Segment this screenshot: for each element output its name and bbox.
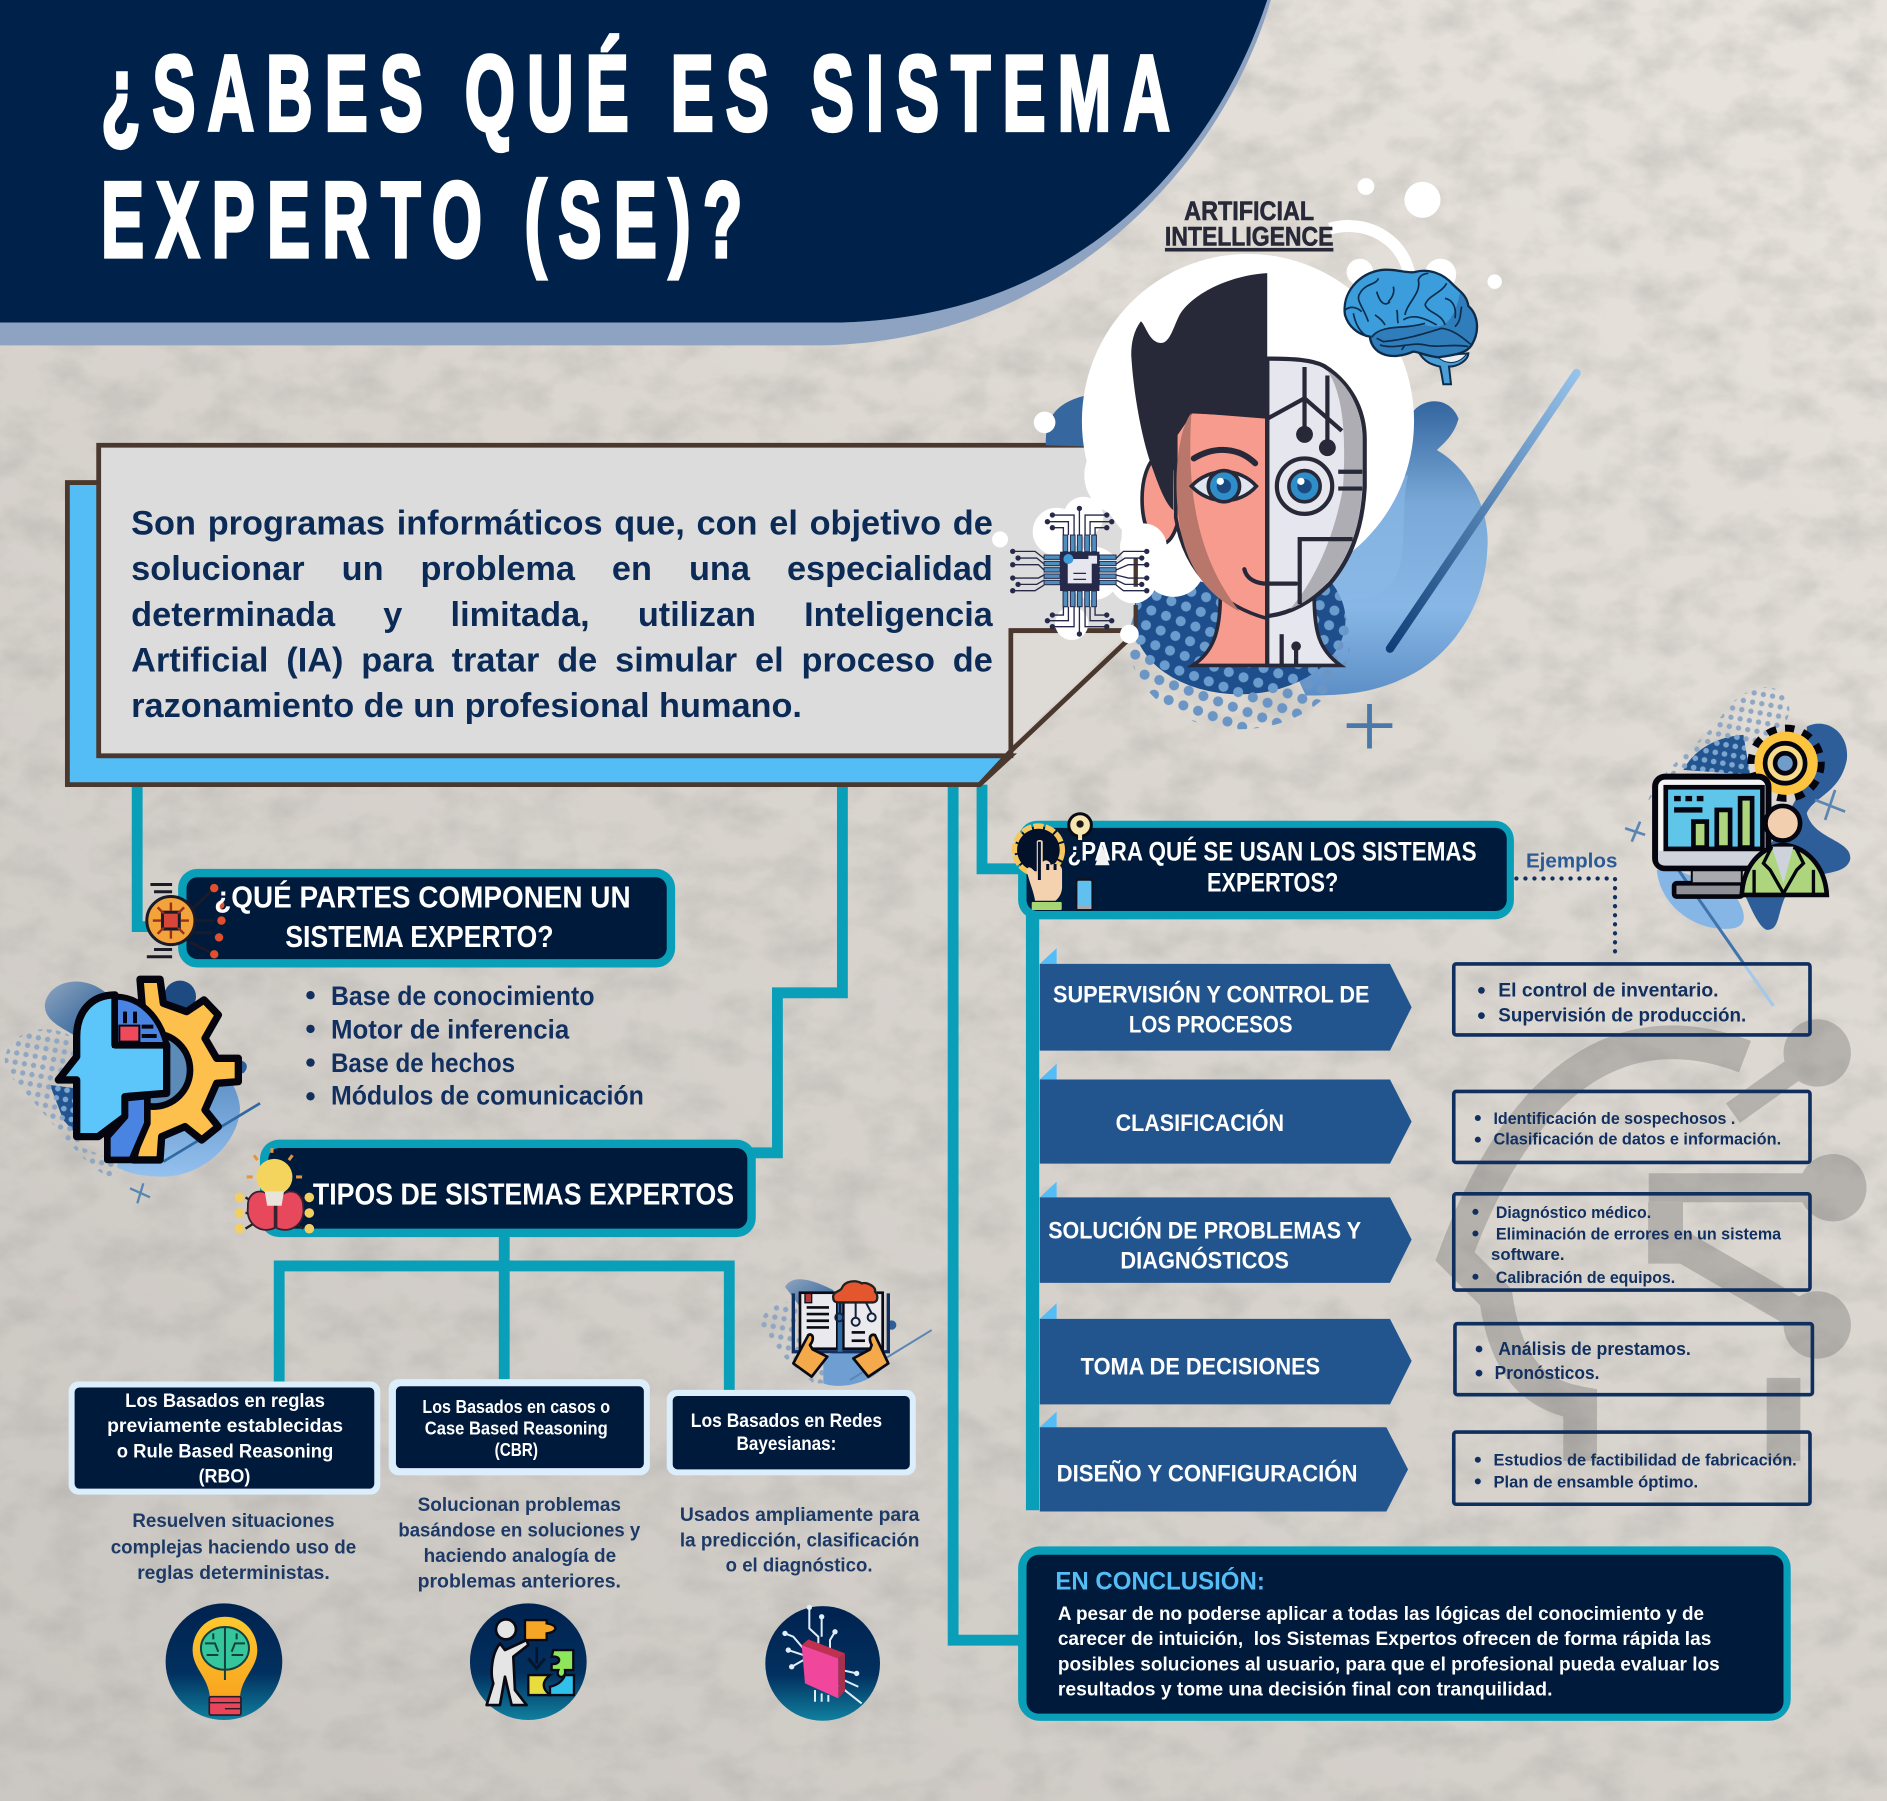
conclusion panel: resultados y tome una decisión final con tranquilidad. bbox=[1058, 1680, 1552, 1701]
AI label: ARTIFICIAL bbox=[1184, 196, 1314, 226]
icon disc: pink chip bbox=[765, 1605, 880, 1721]
pentagon: clasificacion: CLASIFICACIÓN bbox=[1116, 1109, 1284, 1137]
text: redes description bbox=[680, 1504, 920, 1577]
connector lines bbox=[137, 785, 1033, 1640]
definition text: Artificial (IA) para tratar de simular el proceso de bbox=[131, 642, 993, 680]
examples: clasificacion bbox=[1454, 1091, 1810, 1162]
type card: reglas: (RBO) bbox=[199, 1466, 250, 1488]
type card: casos: (CBR) bbox=[495, 1440, 538, 1460]
type card: reglas bbox=[69, 1381, 380, 1495]
type card: reglas: Los Basados en reglas bbox=[125, 1390, 325, 1412]
icon: brain bbox=[1345, 270, 1477, 384]
type card: redes bbox=[667, 1390, 916, 1475]
examples: solucion: Eliminación de errores en un sistema bbox=[1496, 1224, 1782, 1243]
text: reglas description: reglas deterministas. bbox=[137, 1562, 330, 1584]
heading: partes bbox=[147, 869, 675, 968]
dotted connector bbox=[1516, 878, 1615, 960]
text: reglas description: Resuelven situaciones bbox=[132, 1510, 335, 1532]
definition text: determinada y limitada, utilizan Inteligencia bbox=[131, 596, 993, 634]
examples: clasificacion: Identificación de sospechosos . bbox=[1493, 1109, 1735, 1128]
heading: usos bbox=[1014, 814, 1514, 919]
pentagon: solucion: SOLUCIÓN DE PROBLEMAS Y bbox=[1048, 1216, 1361, 1244]
pentagon: supervision: SUPERVISIÓN Y CONTROL DE bbox=[1053, 980, 1370, 1008]
type card: reglas: previamente establecidas bbox=[107, 1415, 343, 1437]
neck bbox=[1193, 596, 1341, 665]
pentagon: solucion bbox=[1040, 1182, 1412, 1283]
heading: usos: EXPERTOS? bbox=[1207, 868, 1338, 898]
title: ¿SABES QUÉ ES SISTEMA bbox=[101, 33, 1170, 153]
definition text: razonamiento de un profesional humano. bbox=[131, 688, 802, 726]
examples: decisiones bbox=[1455, 1324, 1812, 1395]
pentagon: clasificacion bbox=[1040, 1064, 1412, 1164]
heading: tipos: TIPOS DE SISTEMAS EXPERTOS bbox=[313, 1179, 734, 1212]
pentagon: decisiones bbox=[1040, 1303, 1412, 1404]
pentagon: diseno bbox=[1040, 1412, 1408, 1511]
examples: diseno: Estudios de factibilidad de fabricación. bbox=[1493, 1451, 1797, 1470]
list: partes: Base de hechos bbox=[331, 1048, 515, 1078]
icon: circuit chip bbox=[992, 497, 1167, 643]
examples: supervision: El control de inventario. bbox=[1498, 980, 1719, 1001]
pentagon: solucion: DIAGNÓSTICOS bbox=[1120, 1246, 1289, 1274]
plus mark bbox=[1347, 704, 1392, 749]
eyes and mouth bbox=[1191, 450, 1332, 584]
conclusion panel: A pesar de no poderse aplicar a todas las lógicas del conocimiento y de bbox=[1058, 1604, 1704, 1625]
AI label: INTELLIGENCE bbox=[1165, 221, 1333, 251]
pentagon: supervision: LOS PROCESOS bbox=[1129, 1012, 1292, 1039]
pentagon: diseno: DISEÑO Y CONFIGURACIÓN bbox=[1057, 1459, 1357, 1487]
icon disc: bulb with brain bbox=[166, 1603, 282, 1720]
list: partes bbox=[306, 981, 644, 1111]
examples: solucion: Calibración de equipos. bbox=[1496, 1268, 1675, 1287]
examples: supervision bbox=[1454, 964, 1810, 1035]
title bbox=[101, 33, 1170, 279]
type card: casos: Los Basados en casos o bbox=[422, 1397, 610, 1417]
icon: orange chip bbox=[147, 884, 226, 959]
text: redes description: la predicción, clasificación bbox=[680, 1529, 919, 1551]
examples: solucion bbox=[1454, 1194, 1810, 1290]
text: redes description: Usados ampliamente para bbox=[680, 1504, 920, 1526]
examples: clasificacion: Clasificación de datos e información. bbox=[1493, 1129, 1781, 1148]
examples: solucion: Diagnóstico médico. bbox=[1496, 1203, 1651, 1222]
examples: diseno bbox=[1454, 1432, 1810, 1504]
definition text: Son programas informáticos que, con el objetivo de bbox=[131, 504, 993, 543]
definition panel bbox=[67, 445, 1137, 785]
text: casos description: problemas anteriores. bbox=[418, 1570, 621, 1592]
pentagon: decisiones: TOMA DE DECISIONES bbox=[1081, 1353, 1320, 1380]
watermark logo bbox=[1455, 1019, 1867, 1461]
label: ejemplos: Ejemplos bbox=[1526, 850, 1617, 873]
icon: pointer mark bbox=[1095, 846, 1110, 865]
pentagon: supervision bbox=[1040, 948, 1412, 1051]
definition text bbox=[131, 501, 993, 735]
text: reglas description bbox=[111, 1510, 356, 1584]
conclusion panel bbox=[1018, 1546, 1791, 1721]
icon: open book bbox=[760, 1279, 932, 1386]
type card: reglas: o Rule Based Reasoning bbox=[117, 1440, 333, 1462]
list: partes: Módulos de comunicación bbox=[331, 1081, 644, 1111]
text: casos description: Solucionan problemas bbox=[418, 1494, 621, 1516]
heading: partes: SISTEMA EXPERTO? bbox=[285, 921, 554, 954]
icon: hand with gear bbox=[1014, 814, 1093, 910]
examples: diseno: Plan de ensamble óptimo. bbox=[1493, 1472, 1698, 1491]
robot face bbox=[1267, 359, 1365, 665]
type card: casos bbox=[389, 1379, 650, 1475]
conclusion panel: carecer de intuición, los Sistemas Expertos ofrecen de forma rápida las bbox=[1058, 1629, 1711, 1650]
icon: monitor analyst bbox=[1625, 687, 1850, 1006]
title: EXPERTO (SE)? bbox=[101, 159, 742, 279]
text: casos description: basándose en soluciones y bbox=[398, 1520, 640, 1542]
icon disc: puzzle person bbox=[470, 1603, 587, 1720]
human face bbox=[1131, 273, 1267, 619]
examples: supervision: Supervisión de producción. bbox=[1498, 1006, 1746, 1027]
blue blobs bbox=[1046, 395, 1488, 696]
examples: solucion: software. bbox=[1491, 1245, 1564, 1264]
halftone dots bbox=[1129, 545, 1350, 729]
title banner bbox=[0, 0, 1271, 345]
white halo bbox=[1034, 178, 1502, 597]
diagonal stroke bbox=[1390, 373, 1577, 649]
examples: decisiones: Pronósticos. bbox=[1495, 1362, 1599, 1383]
list: partes: Base de conocimiento bbox=[331, 981, 595, 1011]
examples: decisiones: Análisis de prestamos. bbox=[1498, 1338, 1691, 1359]
text: reglas description: complejas haciendo uso de bbox=[111, 1537, 356, 1559]
type card: redes: Bayesianas: bbox=[737, 1434, 836, 1455]
definition text: solucionar un problema en una especialidad bbox=[131, 550, 993, 589]
heading: usos: ¿PARA QUÉ SE USAN LOS SISTEMAS bbox=[1067, 836, 1477, 866]
icon: head with gear bbox=[5, 979, 260, 1203]
heading: partes: ¿QUÉ PARTES COMPONEN UN bbox=[214, 880, 631, 914]
heading: tipos bbox=[235, 1140, 756, 1237]
list: partes: Motor de inferencia bbox=[331, 1015, 569, 1045]
text: casos description: haciendo analogía de bbox=[424, 1545, 616, 1567]
illustration: artificial intelligence face bbox=[992, 178, 1577, 749]
type card: redes: Los Basados en Redes bbox=[691, 1411, 882, 1432]
type card: casos: Case Based Reasoning bbox=[425, 1418, 608, 1438]
text: casos description bbox=[398, 1494, 640, 1592]
conclusion panel: EN CONCLUSIÓN: bbox=[1055, 1566, 1265, 1596]
AI label bbox=[1165, 196, 1333, 252]
text: redes description: o el diagnóstico. bbox=[726, 1555, 872, 1577]
conclusion panel: posibles soluciones al usuario, para que el profesional pueda evaluar los bbox=[1058, 1654, 1720, 1675]
icon: bulb brain bbox=[235, 1148, 314, 1233]
